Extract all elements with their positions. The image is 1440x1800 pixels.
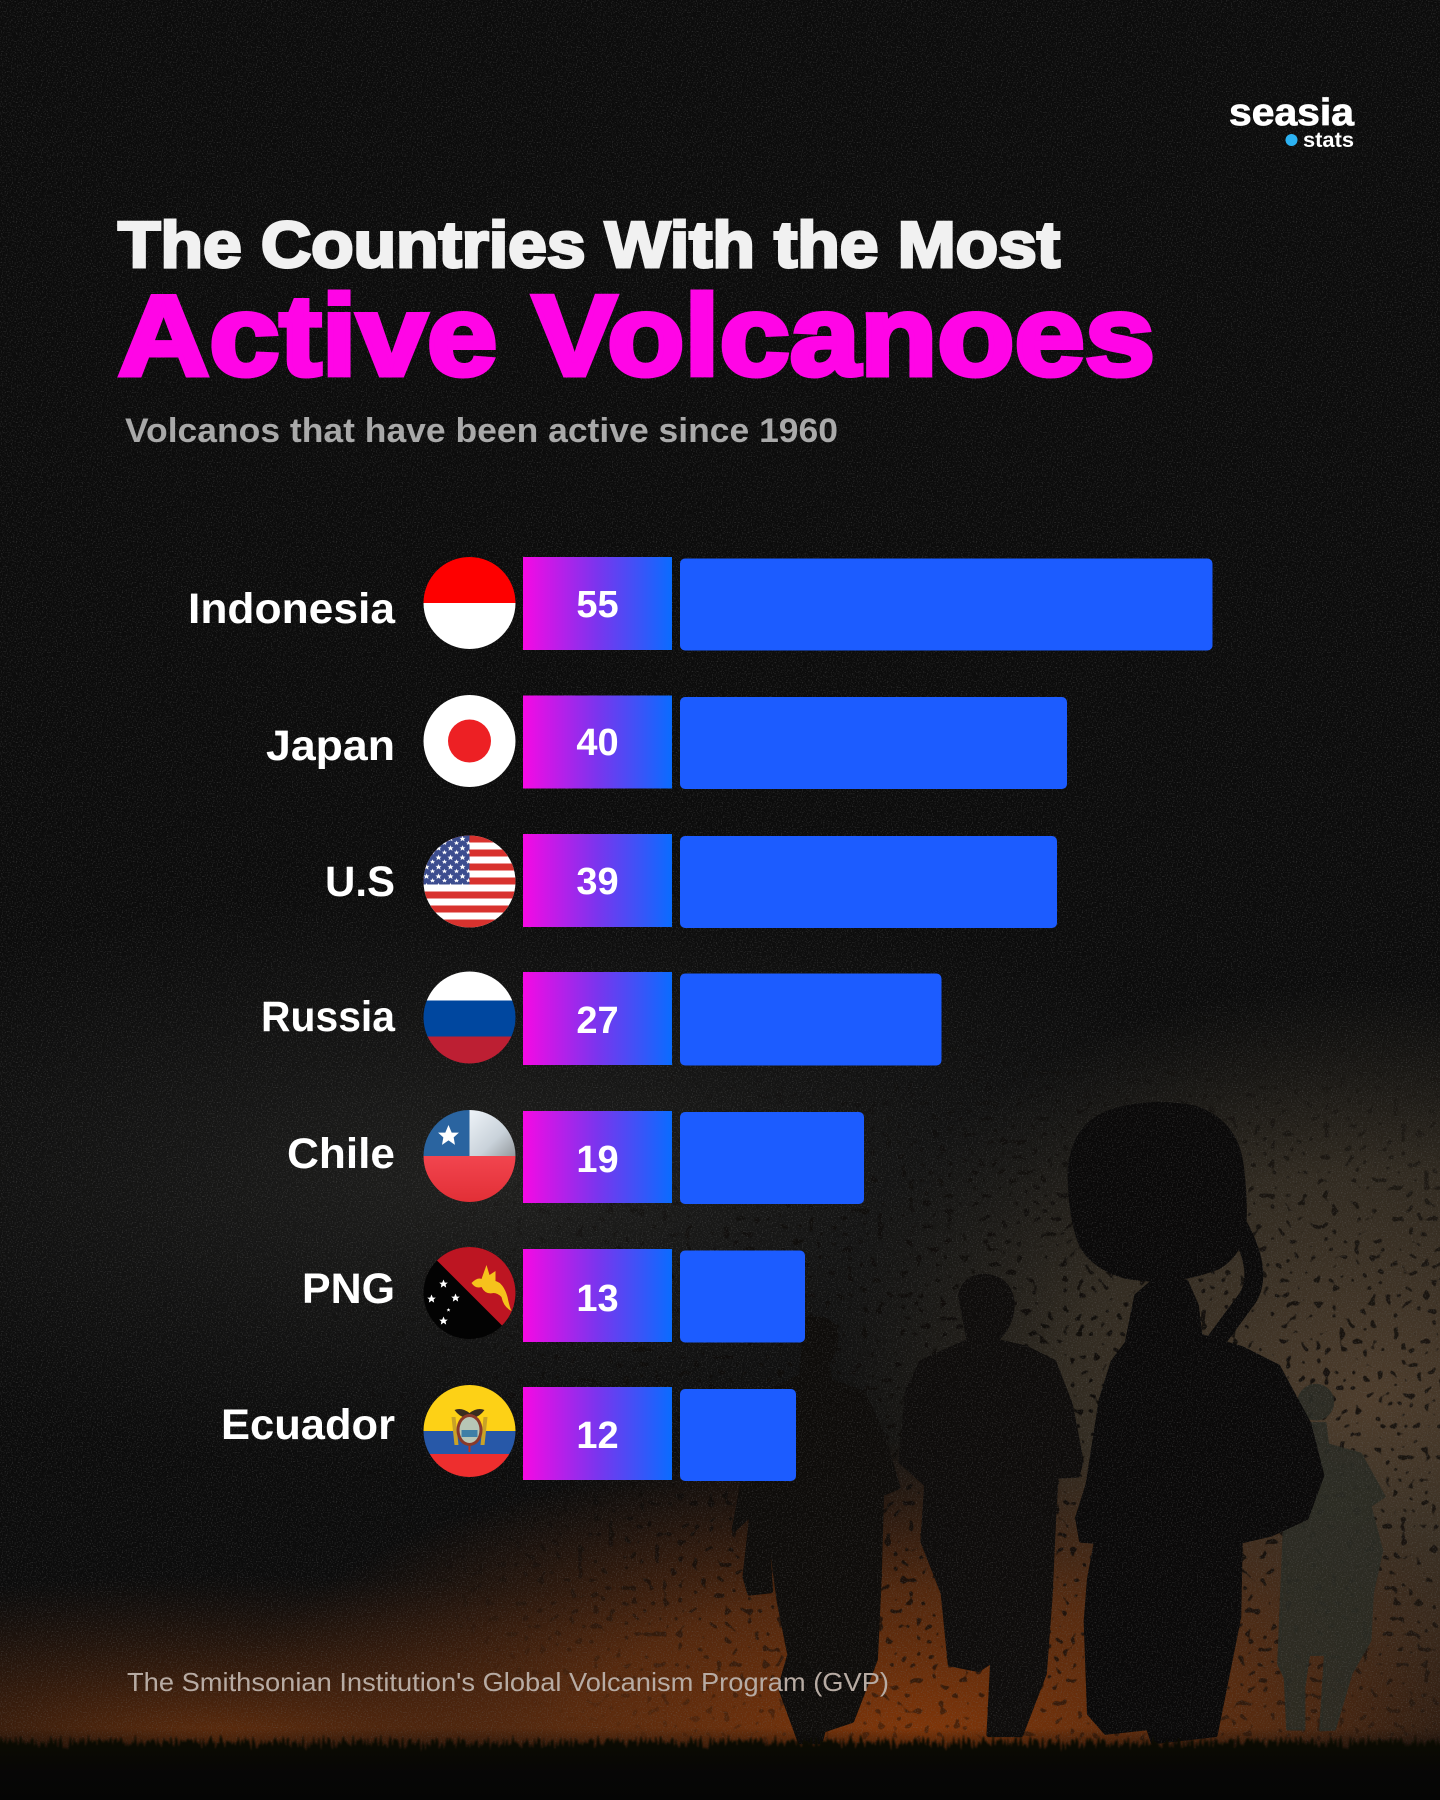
logo: seasia stats: stats: [1303, 129, 1354, 152]
source: The Smithsonian Institution's Global Volcanism Program (GVP): [127, 1667, 889, 1697]
row: PNG: 13: [576, 1278, 619, 1320]
row: Ecuador: [221, 1385, 796, 1481]
foreground figure with basket and bag: [1069, 1103, 1322, 1742]
ghost figure far right: [1279, 1385, 1384, 1730]
row: U.S: U.S: [325, 858, 395, 906]
row: Chile: [287, 1110, 864, 1204]
row: Indonesia: [188, 557, 1212, 650]
middle figure: [901, 1276, 1081, 1735]
row: Indonesia: Indonesia: [188, 585, 396, 633]
row: Russia: 27: [576, 1000, 619, 1042]
row: U.S: 39: [576, 861, 619, 903]
background: [0, 1045, 1440, 1751]
flag: U.S: [424, 836, 516, 928]
logo: seasia stats: [1229, 92, 1355, 152]
title: [118, 208, 1155, 400]
subtitle: Volcanos that have been active since 1960: [125, 412, 838, 450]
row: Japan: 40: [576, 722, 619, 764]
flag: Japan: [424, 695, 516, 787]
title highlight: Active Volcanoes: [118, 273, 1155, 400]
row: Russia: Russia: [261, 993, 396, 1041]
row: PNG: [302, 1247, 805, 1342]
row: Chile: Chile: [287, 1130, 395, 1178]
icon: logo globe dot: [1286, 134, 1298, 146]
flag: Indonesia: [424, 557, 516, 649]
row: Indonesia: 55: [576, 584, 619, 626]
row: PNG: PNG: [302, 1265, 395, 1313]
flag: Chile: [424, 1110, 516, 1202]
row: Japan: Japan: [266, 722, 395, 770]
logo: seasia stats: seasia: [1229, 92, 1355, 134]
flag: Russia: [424, 972, 516, 1064]
title: The Countries With the Most: [118, 208, 1060, 281]
row: Chile: 19: [576, 1139, 619, 1181]
row: Russia: [261, 972, 942, 1066]
bar chart: active volcanoes by country: [188, 557, 1212, 1481]
row: Ecuador: 12: [576, 1415, 619, 1457]
flag: PNG: [424, 1247, 516, 1339]
left figure: [734, 1319, 898, 1742]
row: Japan: [266, 695, 1067, 789]
row: Ecuador: Ecuador: [221, 1401, 395, 1449]
flag: Ecuador: [424, 1385, 516, 1477]
grass ground: [0, 1728, 1440, 1800]
row: U.S: [325, 834, 1057, 928]
silhouettes of people walking: [734, 1103, 1384, 1742]
